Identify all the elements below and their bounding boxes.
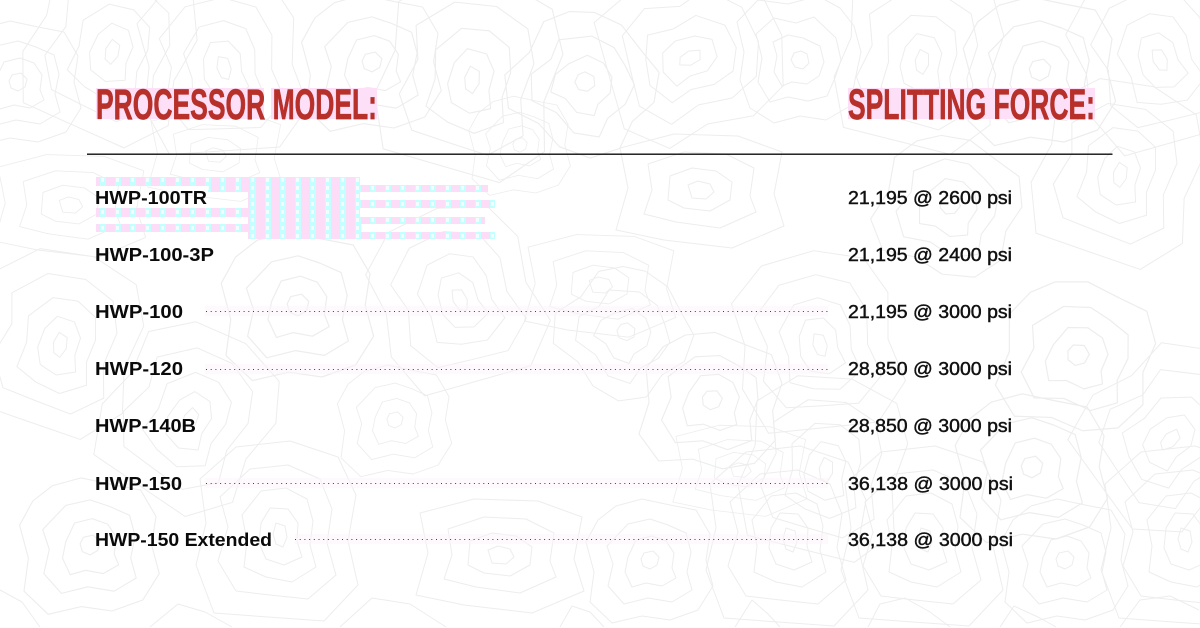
splitting force values: 36,138 @ 3000 psi — [848, 529, 1013, 550]
heading: processor model: PROCESSOR MODEL: — [96, 81, 377, 129]
rendering artifact: striped pink and cyan ghost bands — [96, 177, 495, 239]
heading: processor model — [96, 81, 377, 129]
splitting force values: 36,138 @ 3000 psi — [848, 473, 1013, 494]
model list — [95, 187, 272, 550]
splitting force values — [848, 187, 1013, 550]
model list: HWP-100-3P — [95, 244, 214, 265]
model list: HWP-150 — [95, 473, 182, 494]
splitting force values: 21,195 @ 2600 psi — [848, 187, 1012, 208]
model list: HWP-100TR — [95, 187, 207, 208]
model list: HWP-150 Extended — [95, 529, 272, 550]
splitting force values: 28,850 @ 3000 psi — [848, 415, 1012, 436]
model list: HWP-120 — [95, 358, 183, 379]
model list: HWP-100 — [95, 301, 183, 322]
splitting force values: 21,195 @ 2400 psi — [848, 244, 1012, 265]
splitting force values: 28,850 @ 3000 psi — [848, 358, 1012, 379]
model list: HWP-140B — [95, 415, 196, 436]
header rule — [87, 154, 1112, 155]
dotted leader lines — [205, 306, 828, 544]
splitting force values: 21,195 @ 3000 psi — [848, 301, 1012, 322]
